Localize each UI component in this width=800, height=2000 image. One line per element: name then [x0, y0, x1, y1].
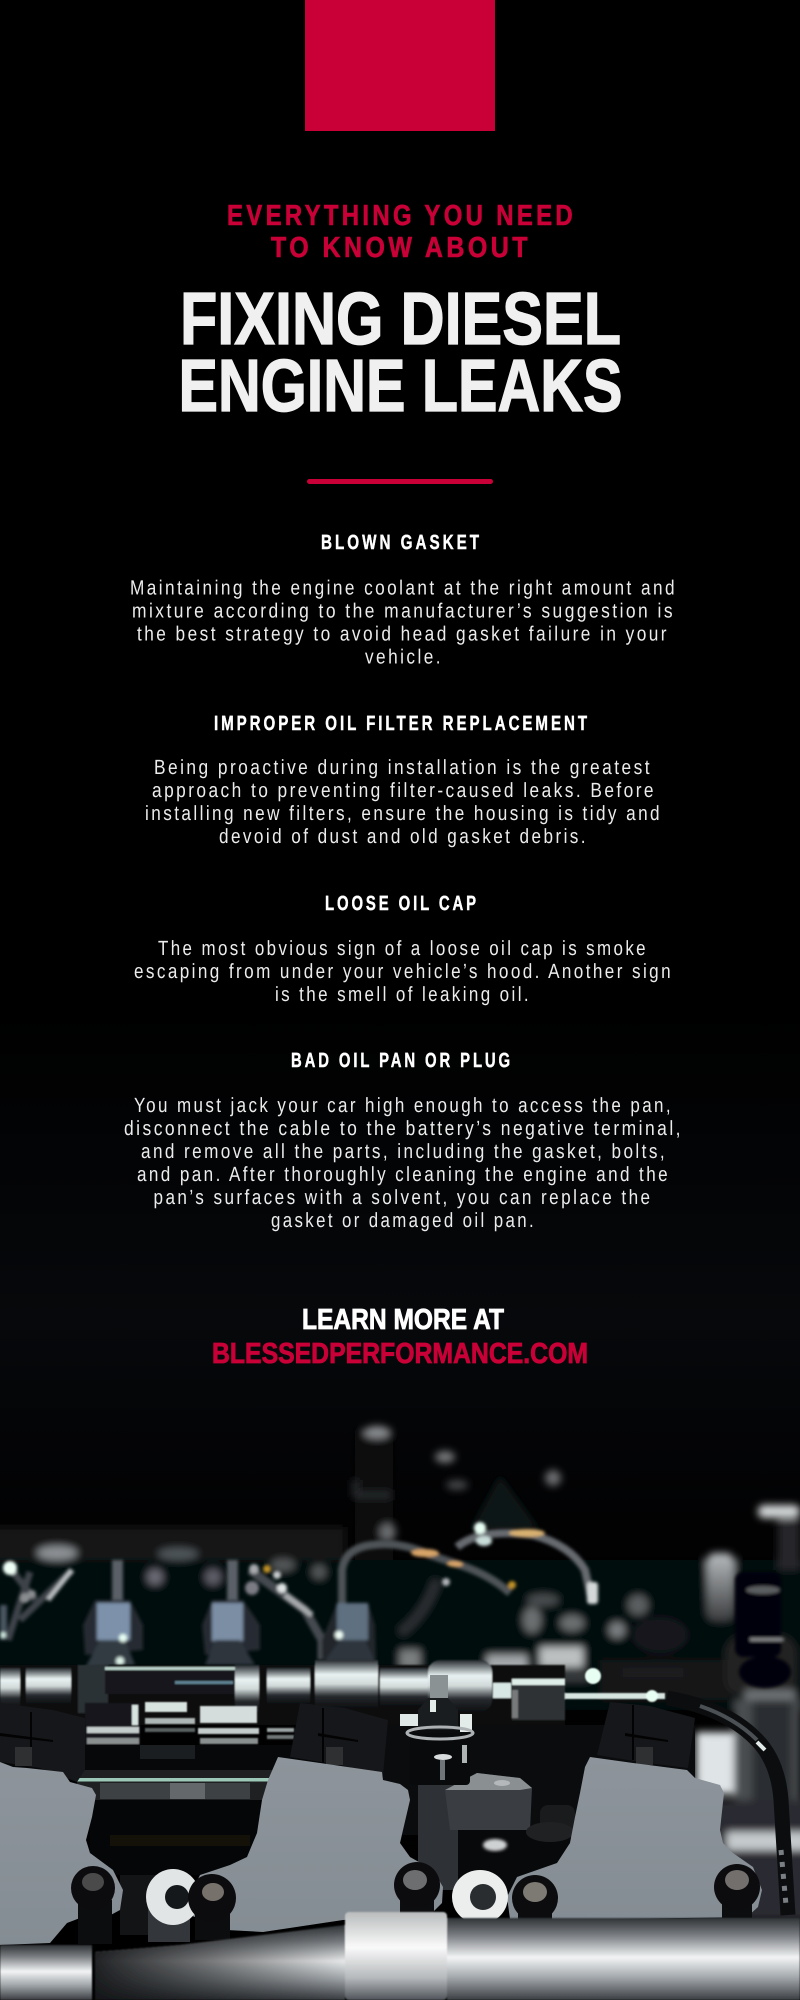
text: bad oil pan or plug: and remove all the parts, including the gasket, bolts, [141, 1140, 667, 1163]
text: blown gasket: vehicle. [365, 646, 443, 668]
heading: bad oil pan or plug: BAD OIL PAN OR PLUG [291, 1049, 513, 1072]
heading: loose oil cap: LOOSE OIL CAP [325, 892, 479, 915]
engine photo illustration [0, 1426, 800, 2000]
text: bad oil pan or plug [124, 1094, 683, 1232]
text: bad oil pan or plug: gasket or damaged oil pan. [271, 1209, 536, 1232]
text: blown gasket: the best strategy to avoid head gasket failure in your [137, 622, 669, 646]
text: improper oil filter replacement [145, 756, 662, 848]
text: bad oil pan or plug: pan’s surfaces with a solvent, you can replace the [154, 1186, 652, 1209]
black connectors [0, 1702, 695, 1782]
text: loose oil cap [134, 937, 673, 1006]
blurred engine background [0, 1426, 800, 1920]
curved fuel pipe [667, 1698, 788, 1915]
text: bad oil pan or plug: You must jack your car high enough to access the pan, [134, 1094, 673, 1117]
chrome blocks below rail [85, 1702, 294, 1745]
text: blown gasket [130, 576, 677, 668]
call to action: BLESSEDPERFORMANCE.COM [212, 1338, 588, 1370]
section: bad oil pan or plug [124, 1049, 683, 1232]
subtitle: TO KNOW ABOUT [271, 232, 531, 264]
text: bad oil pan or plug: and pan. After thoroughly cleaning the engine and the [137, 1163, 670, 1186]
title: ENGINE LEAKS [178, 344, 622, 427]
fuel pipes and injectors [0, 1522, 598, 1668]
text: loose oil cap: escaping from under your vehicle’s hood. Another sign [134, 960, 673, 983]
text: improper oil filter replacement: approach to preventing filter-caused leaks. Before [152, 779, 656, 802]
title [178, 277, 622, 427]
text: improper oil filter replacement: installing new filters, ensure the housing is tidy and [145, 802, 662, 825]
fuel rail [0, 1660, 665, 1725]
grey plates [0, 1757, 762, 1945]
nut and stud [400, 1675, 473, 1785]
subtitle: EVERYTHING YOU NEED [227, 200, 576, 232]
heading: improper oil filter replacement: IMPROPER OIL FILTER REPLACEMENT [214, 712, 590, 735]
bracket and dark washers [418, 1773, 575, 1890]
heading: blown gasket: BLOWN GASKET [321, 531, 482, 554]
divider [307, 479, 493, 484]
red header block [305, 0, 495, 131]
dark rail support band [0, 1725, 695, 1935]
section: blown gasket [130, 531, 677, 668]
text: loose oil cap: The most obvious sign of a loose oil cap is smoke [158, 937, 648, 960]
text: loose oil cap: is the smell of leaking oil. [275, 983, 531, 1006]
section: loose oil cap [134, 892, 673, 1006]
text: improper oil filter replacement: Being proactive during installation is the greatest [154, 756, 652, 779]
title: FIXING DIESEL [180, 277, 621, 360]
call to action: LEARN MORE AT [302, 1304, 504, 1336]
text: improper oil filter replacement: devoid of dust and old gasket debris. [219, 825, 588, 848]
call to action [212, 1304, 588, 1370]
section: improper oil filter replacement [145, 712, 662, 848]
subtitle [227, 200, 576, 264]
blurred black intake at right [735, 1572, 791, 1688]
text: blown gasket: Maintaining the engine coolant at the right amount and [130, 576, 677, 600]
washers [146, 1869, 508, 1942]
text: blown gasket: mixture according to the manufacturer’s suggestion is [132, 600, 675, 622]
large foreground pipes [0, 1912, 800, 2000]
bolts [71, 1862, 760, 1944]
text: bad oil pan or plug: disconnect the cable to the battery’s negative terminal, [124, 1117, 683, 1140]
